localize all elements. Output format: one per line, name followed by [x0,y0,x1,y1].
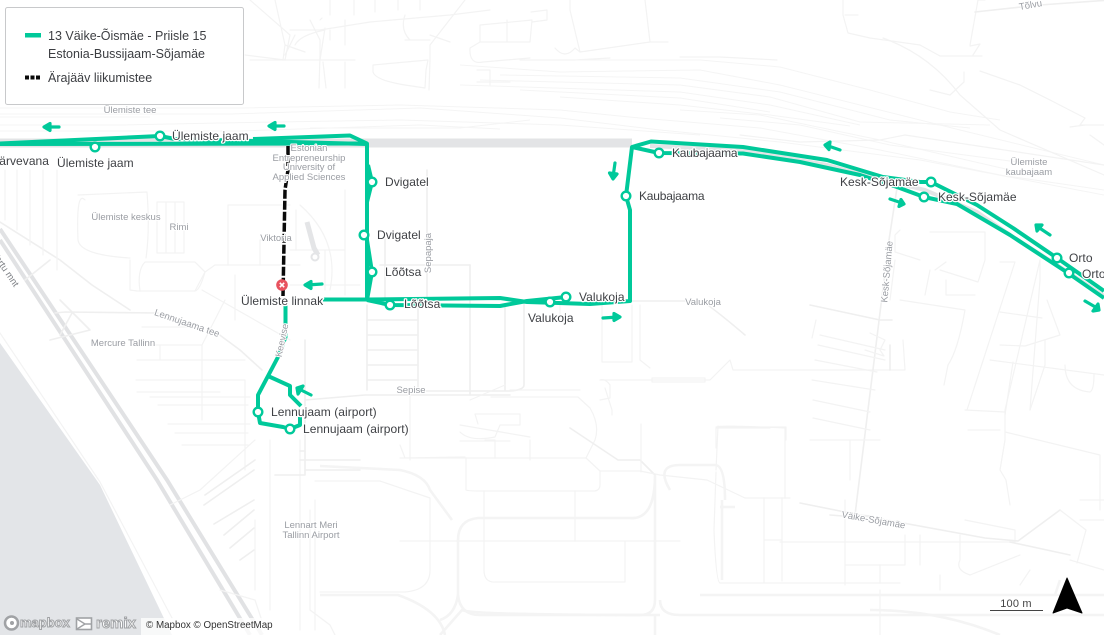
legend: route stops: Estonia-Bussijaam-Sõjamäe [48,47,205,61]
base map roads [0,170,1104,635]
map place labels: Mercure Tallinn [91,338,155,349]
map place labels: Estonian [291,143,327,154]
stop labels: Kaubajaama [672,146,738,160]
stop labels: Dvigatel [385,175,429,189]
map place labels: Sepapaja [423,232,434,273]
direction arrows [44,122,1099,395]
stop labels: Kaubajaama [639,189,705,203]
stop labels: Lõõtsa [385,265,422,279]
map logos: mapbox [20,615,71,630]
stop labels: Orto [1069,251,1093,265]
icon: north arrow [1053,578,1082,613]
stop labels: Lõõtsa [404,297,441,311]
map place labels: Applied Sciences [273,172,346,183]
track bed between routes [650,146,1104,296]
map logos [5,615,137,632]
stop labels: Ülemiste linnak [241,294,324,308]
stop labels: Kesk-Sõjamäe [938,190,1017,204]
attribution: © Mapbox © OpenStreetMap [146,620,273,631]
map place labels: Valukoja [685,297,722,308]
scale bar [990,598,1043,610]
closure marker [276,279,288,291]
legend panel [6,8,244,104]
map place labels: Rimi [170,222,188,233]
legend: dashed line key [25,76,41,80]
stop labels [0,129,1104,436]
stop labels: Lennujaam (airport) [303,422,409,436]
north side roads and rail yard [0,0,1104,195]
map place labels: kaubajaam [1006,167,1052,178]
map place labels: Viktoria [260,233,292,244]
map place labels: Kesk-Sõjamäe [879,241,896,303]
map place labels: Entrepreneurship [273,153,345,164]
map place labels: Ülemiste [1011,157,1047,168]
water body [0,343,172,635]
scale bar: 100 m [1000,598,1032,610]
legend: route line key [25,33,41,38]
map place labels: Sepise [396,385,426,396]
map place labels: Tallinn Airport [282,530,340,541]
map place labels: Lennujaama tee [153,307,221,340]
stop labels: Ülemiste jaam [57,156,134,170]
map place labels: University of [283,162,335,173]
removed route segment: dashed black [283,146,288,296]
map place labels: Lennart Meri [284,520,338,531]
route line 13 [0,136,1104,429]
stop labels: Kesk-Sõjamäe [840,175,919,189]
map place labels: Ülemiste keskus [91,212,161,223]
map place labels: Ülemiste tee [104,105,156,116]
attribution [141,618,274,635]
legend: removed route label: Ärajääv liikumistee [48,71,152,85]
stop labels: Valukoja [528,311,574,325]
map logos: remix [96,615,137,632]
map place labels: Väike-Sõjamäe [841,510,906,532]
stop labels: Dvigatel [377,228,421,242]
legend: route name: 13 Väike-Õismäe - Priisle 15 [48,28,206,43]
stop labels: Valukoja [579,290,625,304]
stop labels: Lennujaam (airport) [271,405,377,419]
map place labels: Keevise [274,323,291,358]
stop labels: Ülemiste jaam [172,129,249,143]
stops [91,132,1073,433]
